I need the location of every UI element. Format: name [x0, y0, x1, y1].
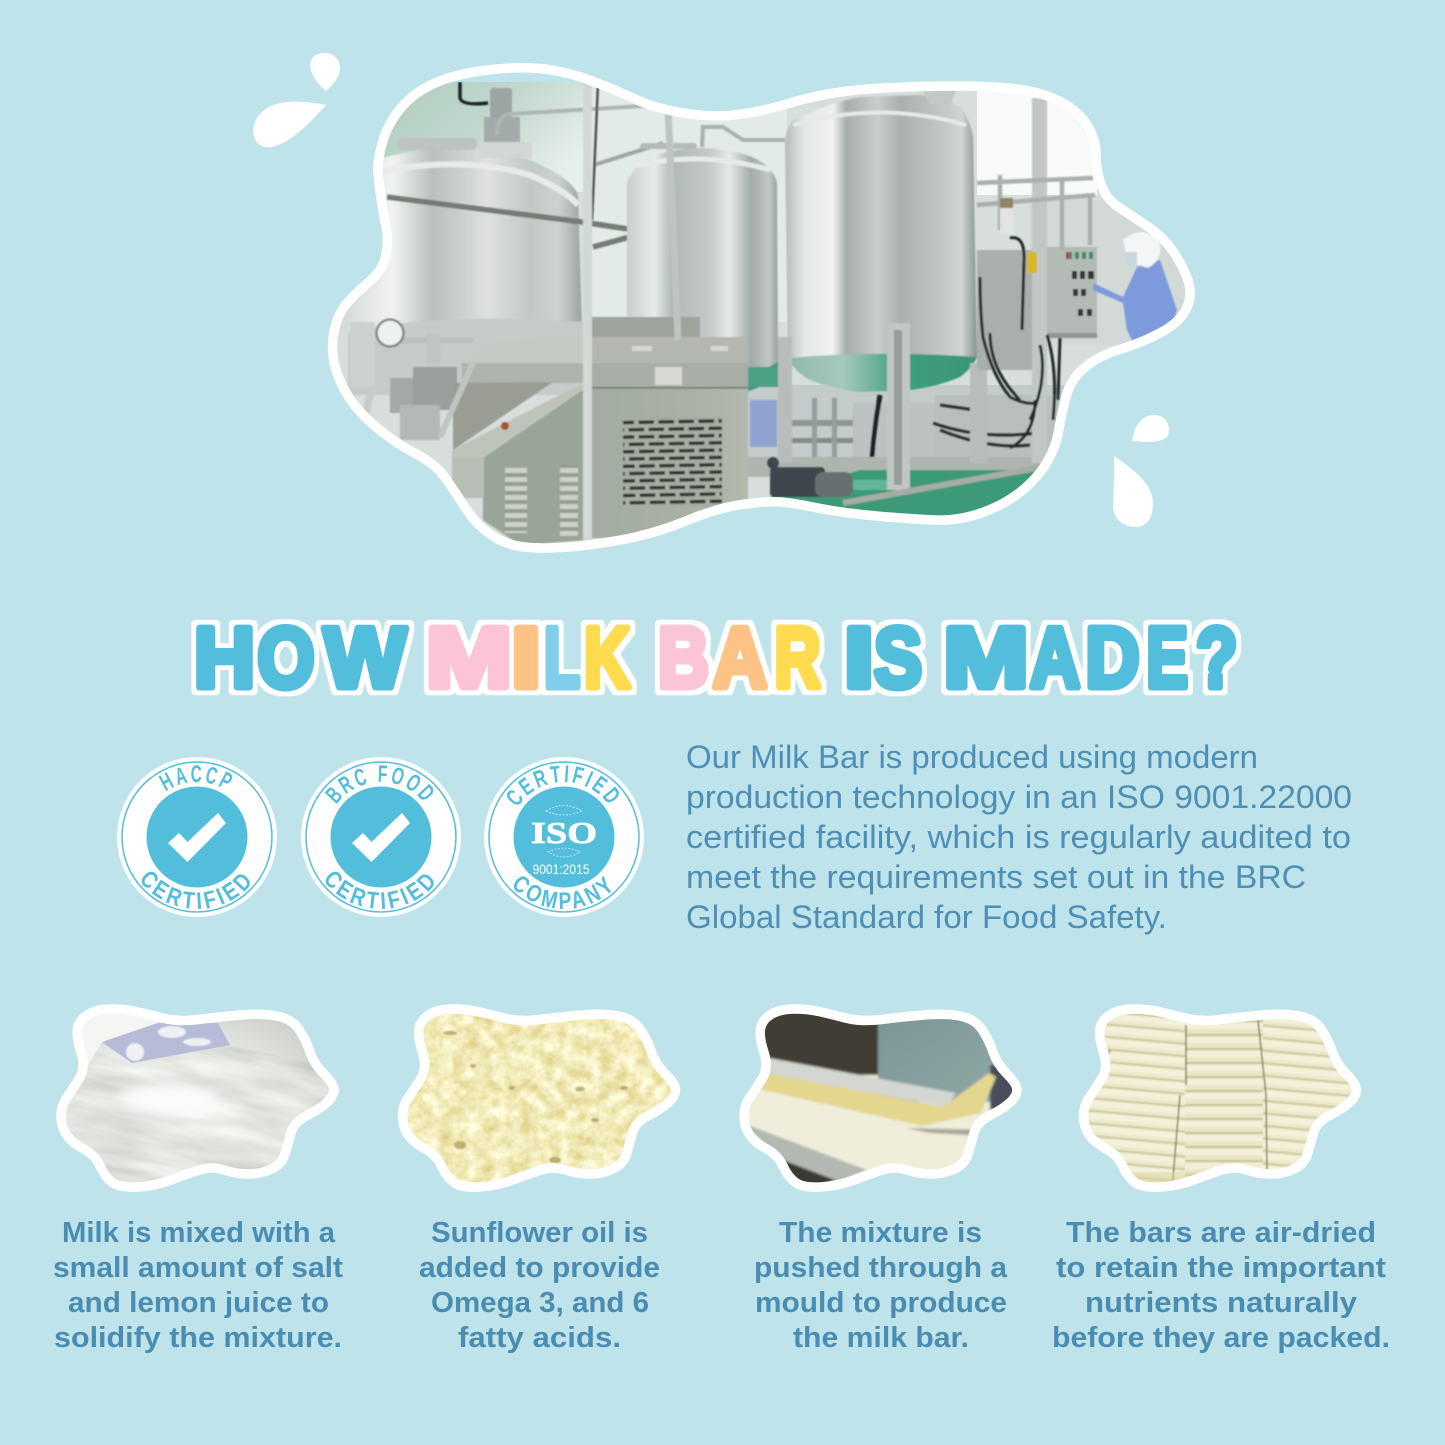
title: A — [713, 611, 767, 706]
caption: step 2: Omega 3, and 6 — [431, 1287, 649, 1319]
caption: step 4 — [1052, 1217, 1390, 1354]
title: O — [258, 611, 314, 706]
pipes top right — [977, 175, 1095, 250]
title: L — [544, 611, 580, 706]
title: M — [944, 611, 1028, 706]
right tank — [784, 94, 978, 358]
icon: milk splash droplets top left — [253, 53, 340, 147]
green floor — [768, 469, 1035, 516]
pipes and frame — [935, 395, 1060, 460]
caption: step 3: The mixture is — [779, 1217, 982, 1249]
title: M — [426, 611, 512, 706]
left tank — [363, 149, 582, 327]
title: E — [1146, 611, 1188, 706]
caption: step 4: nutrients naturally — [1085, 1287, 1357, 1319]
caption: step 1: Milk is mixed with a — [62, 1217, 336, 1249]
worker — [1093, 260, 1177, 343]
title: R — [774, 611, 820, 706]
caption: step 2: Sunflower oil is — [431, 1217, 648, 1249]
title: H — [194, 611, 255, 706]
text block: production description: Global Standard for Food Safety. — [686, 899, 1167, 935]
white frame — [333, 68, 1190, 548]
caption: step 3 — [754, 1217, 1008, 1354]
caption: step 1: and lemon juice to — [68, 1287, 329, 1319]
pump — [770, 467, 825, 497]
caption: step 4: to retain the important — [1056, 1252, 1386, 1284]
caption: step 2: fatty acids. — [458, 1322, 621, 1354]
legs — [778, 337, 792, 462]
caption: step 3: mould to produce — [755, 1287, 1007, 1319]
badge: HACCP certified — [117, 757, 277, 917]
text block: production description: production technology in an ISO 9001.22000 — [686, 779, 1352, 815]
text block: production description: Our Milk Bar is produced using modern — [686, 739, 1258, 775]
badge: ISO 9001:2015 certified company: COMPANY — [514, 876, 612, 910]
text block: production description: meet the requirements set out in the BRC — [686, 859, 1306, 895]
caption: step 3: the milk bar. — [793, 1322, 969, 1354]
badge: BRC Food certified — [301, 757, 461, 917]
caption: step 2: added to provide — [419, 1252, 660, 1284]
panel: step 2 sunflower oil photo — [395, 1000, 690, 1195]
badge: HACCP certified: CERTIFIED — [142, 872, 250, 909]
caption: step 1 — [53, 1217, 343, 1354]
bar in front of tank — [387, 197, 648, 247]
title: A — [1030, 611, 1080, 706]
panel: step 1 milk photo — [56, 1004, 339, 1192]
badge: HACCP certified: HACCP — [158, 765, 232, 791]
caption: step 4: The bars are air-dried — [1066, 1217, 1376, 1249]
middle tank — [627, 148, 778, 392]
vertical poles — [583, 82, 592, 540]
title: K — [584, 611, 630, 706]
top pipes — [497, 105, 660, 135]
caption: step 2 — [419, 1217, 660, 1354]
cables — [980, 238, 1060, 448]
text block: production description — [686, 739, 1352, 935]
badge: BRC Food certified: CERTIFIED — [326, 872, 434, 909]
panel: factory photo in milk-shaped frame — [330, 55, 1195, 552]
caption: step 4: before they are packed. — [1052, 1322, 1390, 1354]
homogenizer machine box — [592, 317, 700, 337]
equipment under tanks — [750, 400, 777, 447]
caption: step 3: pushed through a — [754, 1252, 1008, 1284]
agitator motor and cable — [460, 82, 488, 104]
title: I — [511, 611, 541, 706]
title: W — [324, 611, 407, 706]
badge: ISO 9001:2015 certified company: 9001:2015 — [532, 861, 590, 877]
badge: ISO 9001:2015 certified company: CERTIFIED — [506, 766, 619, 805]
title: ? — [1196, 611, 1238, 706]
badge: BRC Food certified: BRC FOOD — [324, 765, 434, 804]
panel: step 3 mould photo — [735, 1000, 1030, 1195]
caption: step 1: small amount of salt — [53, 1252, 343, 1284]
title: I — [844, 611, 874, 706]
badge: ISO 9001:2015 certified company — [484, 757, 644, 917]
icon: milk splash droplets right — [1113, 415, 1169, 527]
panel: step 4 dried bars photo — [1075, 1000, 1373, 1197]
gauge and valve — [350, 322, 376, 330]
blue strip above photo — [458, 81, 462, 82]
badge: ISO 9001:2015 certified company: ISO — [531, 815, 597, 850]
homogenizer machine left — [467, 335, 597, 363]
back tank and control box — [977, 250, 1032, 370]
text block: production description: certified facility, which is regularly audited to — [686, 819, 1351, 855]
title: S — [874, 611, 922, 706]
caption: step 1: solidify the mixture. — [54, 1322, 342, 1354]
title: D — [1086, 611, 1140, 706]
title: B — [658, 611, 709, 706]
